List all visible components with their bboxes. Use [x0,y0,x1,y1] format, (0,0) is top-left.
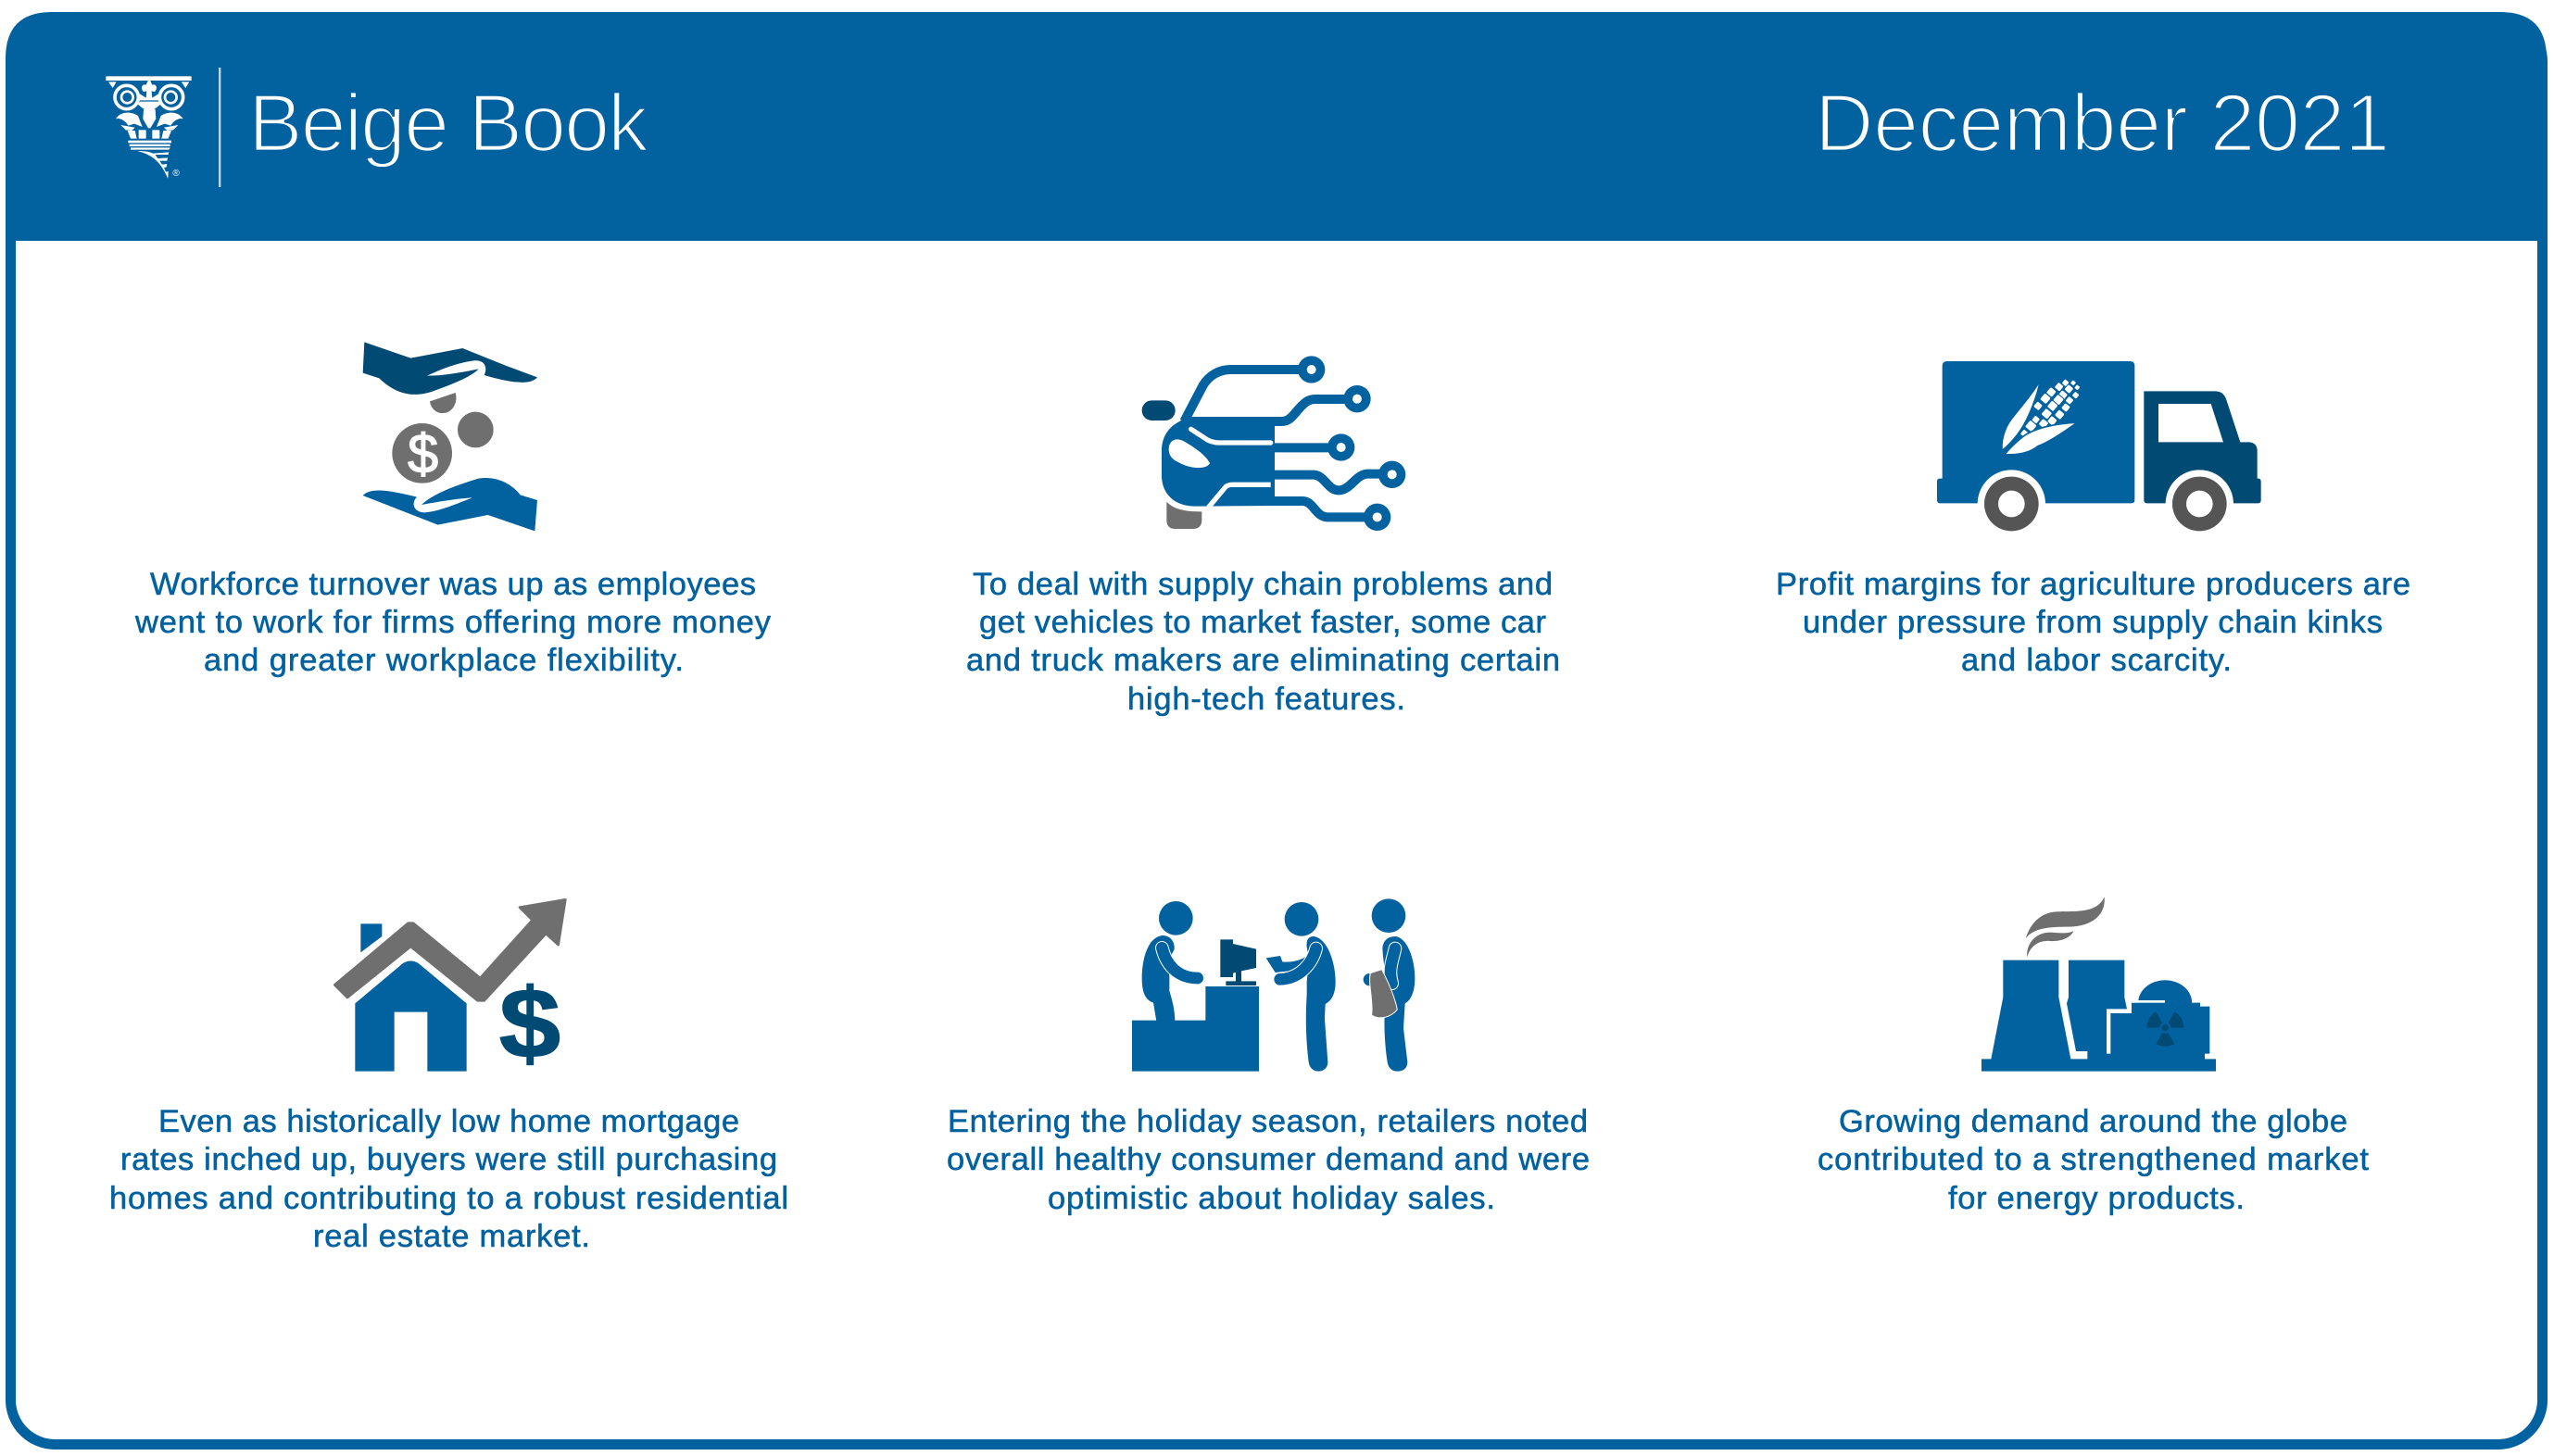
icon: house with rising arrow and dollar sign: $ [499,968,560,1078]
text block: Even as historically low home mortgage [158,1104,739,1139]
icon: hands exchanging coins: $ [408,422,438,484]
text block [1818,1104,2369,1216]
panel: retail [947,898,1590,1216]
icon: connected car with circuit traces [1142,356,1405,531]
panel: workforce turnover [134,342,772,678]
icon: Federal Reserve Bank column logo: ® [172,169,180,179]
text block [966,567,1560,717]
text block: Growing demand around the globe [1839,1104,2347,1139]
text block: get vehicles to market faster, some car [979,605,1546,640]
icon: shoppers at checkout counter [1132,898,1415,1072]
text block: Profit margins for agriculture producers are [1776,567,2410,602]
text block [134,567,772,678]
text block: homes and contributing to a robust residential [109,1181,788,1216]
text block: high-tech features. [1127,682,1405,717]
text block: rates inched up, buyers were still purchasing [120,1142,777,1177]
text block: and truck makers are eliminating certain [966,643,1560,678]
text block: overall healthy consumer demand and were [947,1142,1590,1177]
text block: under pressure from supply chain kinks [1803,605,2383,640]
heading: date: December 2021 [1815,77,2390,169]
text block: real estate market. [313,1219,590,1254]
text block: and labor scarcity. [1961,643,2232,678]
icon: hands exchanging coins [363,342,537,531]
text block [109,1104,788,1254]
text block: optimistic about holiday sales. [1048,1181,1495,1216]
text block [947,1104,1590,1216]
icon: Federal Reserve Bank column logo [106,76,192,179]
text block [1776,567,2410,678]
text block: contributed to a strengthened market [1818,1142,2369,1177]
panel: energy [1818,897,2369,1216]
text block: Entering the holiday season, retailers noted [948,1104,1588,1139]
text block: and greater workplace flexibility. [204,643,684,678]
text block: To deal with supply chain problems and [973,567,1553,602]
text block: Workforce turnover was up as employees [150,567,756,602]
icon: truck with corn [1937,361,2261,538]
heading: Beige Book: Beige Book [248,77,649,169]
icon: power plant with cooling towers [1982,897,2216,1072]
header band [6,12,2548,241]
text block: for energy products. [1948,1181,2245,1216]
header divider [219,68,220,187]
icon: house with rising arrow and dollar sign [334,899,565,1078]
panel: agriculture [1776,361,2410,678]
panel: housing [109,899,788,1254]
panel: vehicle makers [966,356,1560,717]
text block: went to work for firms offering more money [134,605,772,640]
